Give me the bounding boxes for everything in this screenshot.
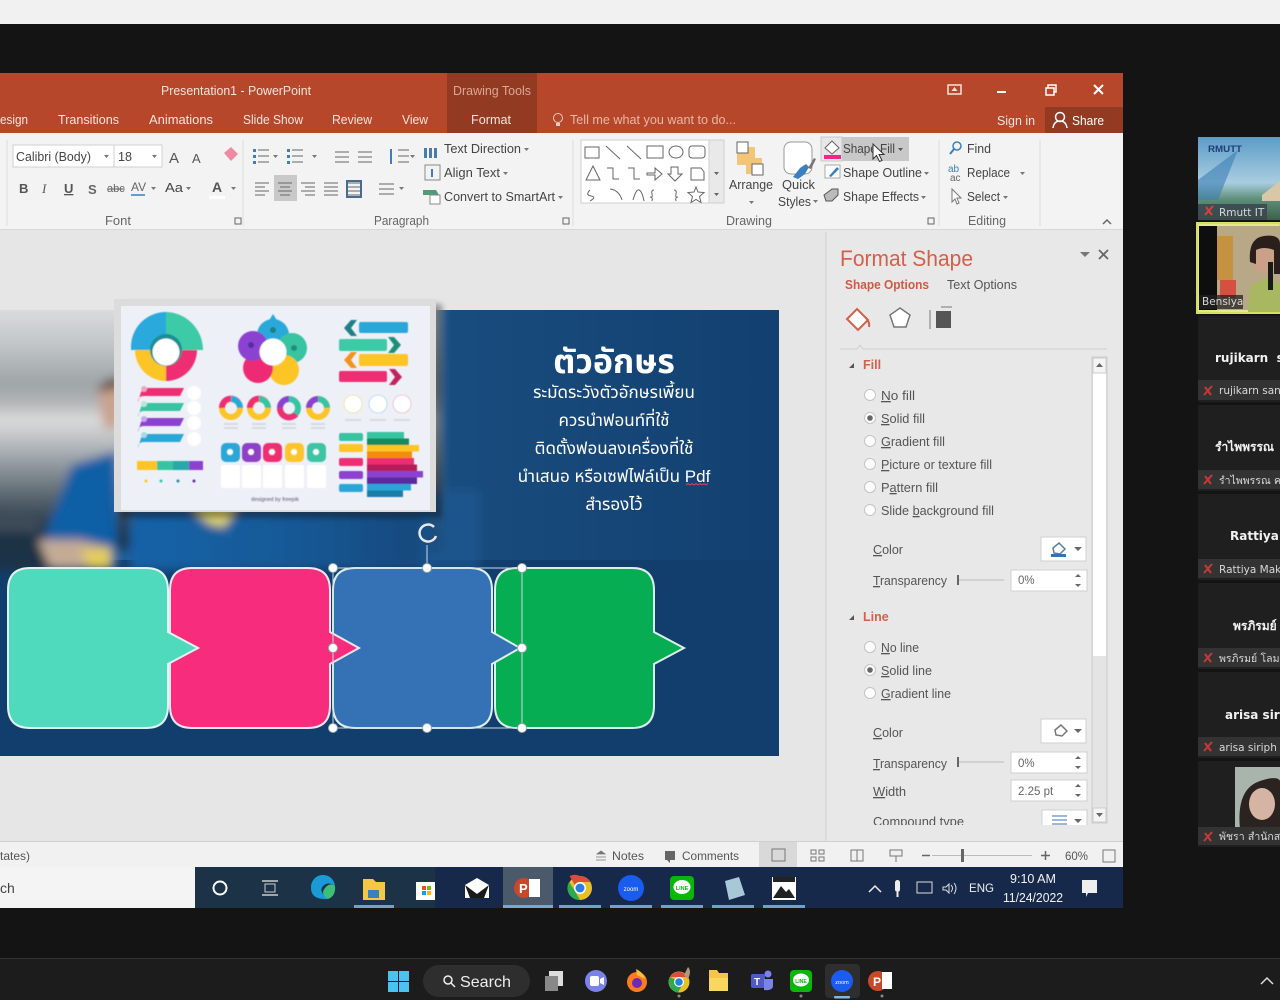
slide title and body text: ติดตั้งฟอนลงเครื่องที่ใช้ — [535, 436, 694, 458]
ring charts — [222, 399, 327, 417]
shape fill button: Shape Fill — [843, 141, 895, 156]
fill section: Color — [873, 542, 904, 557]
system tray: 9:10 AM — [1010, 872, 1056, 886]
pinned app icons: zoom — [624, 887, 638, 893]
fill section: Gradient fill — [881, 434, 945, 449]
line section: Compound type — [873, 814, 964, 829]
font group: abc — [107, 183, 125, 195]
ribbon — [0, 133, 1123, 230]
pinned app icons: LINE — [676, 886, 689, 892]
fill section: Solid fill — [881, 411, 925, 426]
slide title and body text — [518, 343, 711, 514]
ribbon tabs: esign — [0, 112, 28, 127]
app icons: zoom — [835, 980, 849, 986]
participant tile: Pornpirom — [1198, 583, 1280, 669]
line section: No line — [881, 640, 919, 655]
shape outline and effects — [824, 165, 929, 204]
sign in and share: Sign in — [997, 113, 1035, 128]
font group: S — [88, 182, 97, 197]
participant tile: Pornpirom: พรภิรมย์ โลม — [1219, 652, 1280, 665]
font group: U — [64, 181, 73, 196]
ribbon tabs: Animations — [149, 112, 213, 127]
slide title and body text: ระมัดระวังตัวอักษรเพี้ยน — [533, 380, 695, 402]
quick styles button: Quick — [782, 177, 815, 192]
fill section: Fill — [863, 358, 881, 372]
paragraph group — [253, 141, 569, 228]
participant video sidebar — [1197, 137, 1280, 847]
ribbon tabs: Transitions — [58, 112, 119, 127]
status bar: Comments — [682, 849, 739, 863]
participant tile: arisa — [1198, 672, 1280, 758]
quick styles button: Styles — [778, 194, 811, 209]
panel icons — [840, 307, 1107, 349]
shape outline and effects: Shape Effects — [843, 189, 919, 204]
pentagon flower chart — [238, 314, 307, 385]
fill section: 0% — [1018, 575, 1035, 587]
arrange button — [729, 142, 773, 204]
participant tile: Rattiya: Rattiya — [1230, 529, 1279, 543]
system tray: ENG — [969, 881, 994, 895]
app icons: P — [873, 975, 881, 989]
ribbon list — [138, 386, 201, 448]
infographic thumbnail — [114, 299, 442, 518]
line section: Line — [863, 610, 889, 624]
search pill — [423, 965, 530, 997]
ribbon tabs: Slide Show — [243, 112, 304, 127]
fill section: Slide background fill — [881, 503, 994, 518]
tell me box: Tell me what you want to do... — [570, 112, 736, 127]
format shape panel — [826, 230, 1123, 842]
start button — [388, 971, 409, 992]
sign in and share — [997, 112, 1104, 128]
line section — [827, 610, 1091, 842]
app icons — [545, 964, 892, 998]
top browser strip — [0, 0, 1280, 24]
shape outline and effects: Shape Outline — [843, 165, 922, 180]
slide title and body text: สำรองไว้ — [585, 494, 643, 514]
background photo: flight attendant — [0, 290, 480, 570]
donut chart — [131, 312, 203, 381]
paragraph group: Text Direction — [444, 141, 521, 156]
font group: B — [19, 181, 28, 196]
font group — [13, 145, 241, 228]
paragraph group: Paragraph — [374, 214, 429, 228]
sign in and share: Share — [1072, 113, 1104, 128]
running app indicators — [354, 905, 805, 908]
tray chevron — [1261, 978, 1273, 984]
system tray — [869, 872, 1097, 905]
fill section — [849, 358, 1087, 591]
stacked tag bars — [339, 432, 423, 497]
drawing gallery: Drawing — [726, 214, 772, 228]
app icons: LINE — [795, 979, 807, 985]
selection handles — [328, 525, 526, 732]
title bar: Drawing Tools — [453, 84, 531, 98]
font group: 18 — [118, 149, 132, 164]
callout shape: teal — [8, 568, 198, 728]
participant tile: Bensiya: Bensiya — [1202, 296, 1243, 308]
participant tile: Rattiya: Rattiya Mak — [1219, 564, 1280, 576]
status bar: 60% — [1065, 849, 1088, 863]
icon cards — [221, 443, 326, 488]
pinned app icons: P — [519, 881, 528, 896]
status bar: Notes — [612, 849, 644, 863]
callout shape: blue — [333, 568, 520, 728]
drawing gallery — [581, 140, 934, 228]
panel close controls — [1080, 250, 1108, 259]
arrow banners — [339, 320, 408, 385]
app icons: T — [754, 977, 760, 988]
participant tile: arisa: arisa siriph — [1219, 742, 1277, 754]
participant tile: Rattiya — [1198, 494, 1280, 580]
slide — [0, 290, 779, 756]
font group: Font — [105, 214, 132, 228]
editing group: Find — [967, 141, 991, 156]
line section: Color — [873, 725, 904, 740]
panel title: Format Shape — [840, 246, 973, 271]
pinned app icons — [214, 867, 796, 908]
timeline bar — [137, 461, 203, 482]
editing group — [948, 141, 1111, 228]
windows 11 taskbar — [0, 958, 1280, 1000]
option tabs: Text Options — [947, 277, 1017, 292]
participant tile: Bensiya — [1197, 223, 1280, 313]
ribbon tabs: Format — [471, 112, 511, 127]
faint captions — [224, 420, 410, 428]
fill section: Transparency — [873, 573, 947, 588]
participant tile: Rampaipan: รำไพพรรณ — [1215, 439, 1274, 454]
line section: Gradient line — [881, 686, 951, 701]
slide title and body text: ตัวอักษร — [553, 343, 675, 381]
font group: AV — [131, 180, 146, 194]
window controls — [948, 85, 1103, 95]
editing group: Select — [967, 189, 1000, 204]
ribbon tabs — [0, 112, 511, 127]
participant tile: rujikarn — [1198, 316, 1280, 402]
title bar — [0, 73, 1123, 133]
search pill: Search — [460, 974, 511, 991]
participant tile: rujikarn: rujikarn san — [1219, 385, 1280, 397]
participant tile: Rmutt IT: Rmutt IT — [1219, 207, 1265, 219]
participant tile: Patchara: พัชรา สำนักส — [1219, 831, 1280, 843]
editing group: ac — [950, 173, 961, 184]
font group: A — [192, 151, 201, 166]
windows 10 taskbar: ch — [0, 880, 15, 896]
font group: I — [41, 181, 47, 196]
font group: A — [212, 179, 222, 195]
status bar — [0, 842, 1123, 867]
line section: Width — [873, 784, 906, 799]
paragraph group: Convert to SmartArt — [444, 189, 555, 204]
ribbon tabs: Review — [332, 112, 373, 127]
line section: Solid line — [881, 663, 932, 678]
participant tile: Rampaipan — [1198, 405, 1280, 491]
participant tile: Rmutt IT: RMUTT — [1208, 144, 1243, 154]
option tabs — [845, 277, 1017, 292]
line section: 0% — [1018, 758, 1035, 770]
slide title and body text: นำเสนอ หรือเซฟไฟล์เป็น Pdf — [518, 467, 711, 486]
outline percentage circles — [344, 395, 411, 413]
panel scrollbar — [1092, 357, 1107, 823]
font group: Aa — [165, 180, 184, 195]
participant tile: Pornpirom: พรภิรมย์ — [1233, 619, 1277, 633]
PowerPoint window — [0, 73, 1123, 908]
line section: 2.25 pt — [1018, 786, 1054, 798]
participant tile: Rmutt IT — [1198, 137, 1280, 220]
spelling squiggle under Pdf — [686, 484, 708, 485]
fill section: Pattern fill — [881, 480, 938, 495]
mouse cursor — [873, 144, 884, 162]
arrange button: Arrange — [729, 177, 773, 192]
shape fill button — [821, 137, 909, 161]
editing group: Editing — [968, 214, 1006, 228]
paragraph group: Align Text — [444, 165, 500, 180]
system tray: 11/24/2022 — [1003, 891, 1063, 905]
participant tile: Patchara — [1198, 761, 1280, 847]
line section: Transparency — [873, 756, 947, 771]
search box — [0, 867, 195, 908]
editing group: ab — [948, 164, 960, 175]
windows 10 taskbar — [0, 867, 1123, 908]
option tabs: Shape Options — [845, 277, 929, 292]
editing group: Replace — [967, 165, 1010, 180]
ribbon tabs: View — [402, 112, 429, 127]
fill section: Picture or texture fill — [881, 457, 992, 472]
quick styles button — [778, 142, 818, 209]
slide title and body text: ควรนำฟอนท์ที่ใช้ — [559, 408, 670, 430]
font group: Calibri (Body) — [16, 149, 91, 164]
freepik credit: designed by freepik — [251, 497, 299, 503]
slide workspace — [0, 230, 826, 842]
font group: A — [169, 150, 179, 167]
callout shape: pink — [170, 568, 359, 728]
title bar: Presentation1 - PowerPoint — [161, 83, 311, 98]
status bar: tates) — [0, 849, 30, 863]
callout shape: green — [495, 568, 684, 728]
participant tile: Rampaipan: รำไพพรรณ ค — [1219, 474, 1280, 487]
fill section: No fill — [881, 388, 915, 403]
